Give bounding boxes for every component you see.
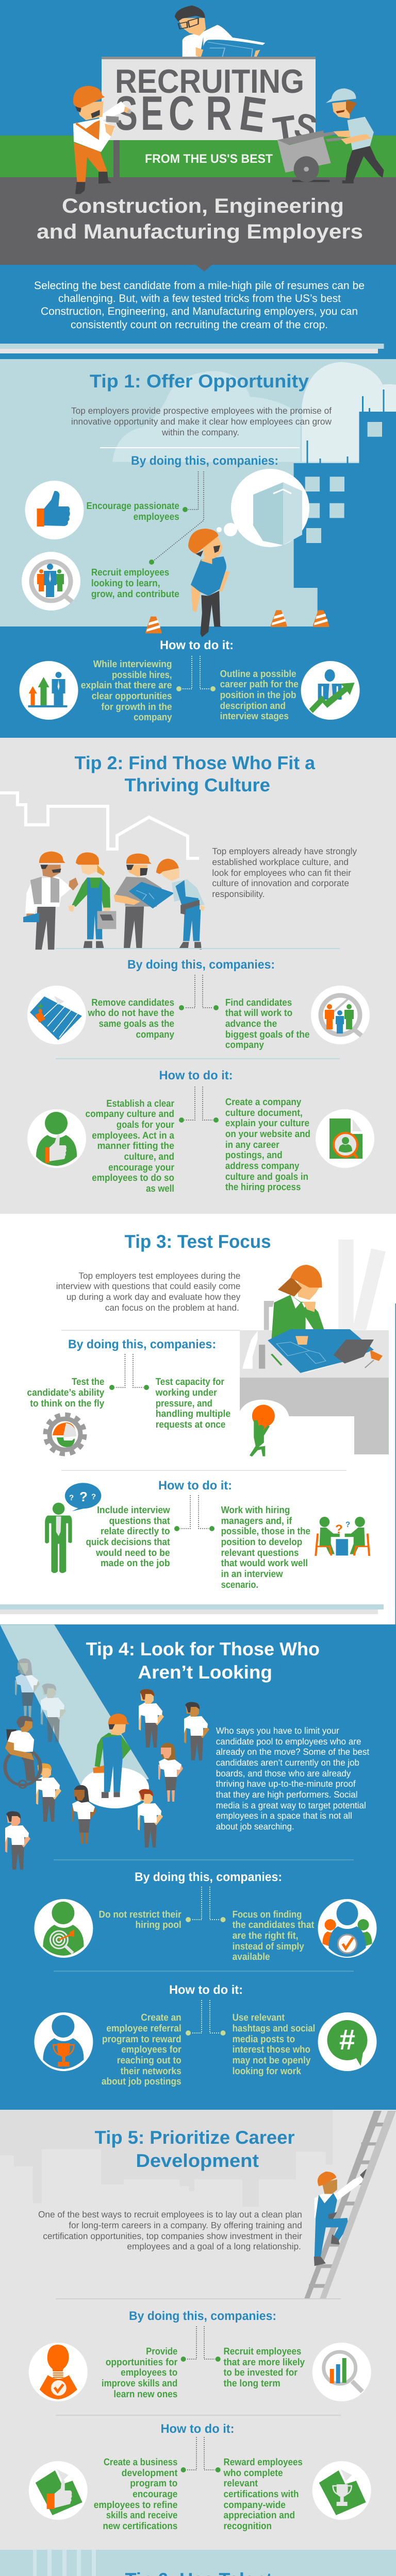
tip 1 how-to left text <box>81 659 172 723</box>
tip 5 how-to left text: program to <box>130 2478 177 2489</box>
tip 1 how-to right text: description and <box>220 701 286 711</box>
main title lines: Construction, Engineering <box>62 195 344 217</box>
tip 2 description <box>212 846 357 899</box>
intro paragraph: challenging. But, with a few tested tricks from the US’s best <box>58 293 341 304</box>
tip 5 description: employees and a goal of a long relationship. <box>127 2241 301 2251</box>
tip 1 benefit: recruit: grow, and contribute <box>91 589 179 600</box>
illustration: team of four workers <box>23 852 205 950</box>
icon: resume with candidates <box>27 986 86 1044</box>
main title lines <box>37 195 363 243</box>
tip 3 benefit left <box>27 1377 105 1409</box>
tip 4 description: employees in a space that is not all <box>216 1810 352 1821</box>
icon: person with question bubble: ? <box>79 1489 88 1504</box>
tip 3 how-to left text: made on the job <box>101 1558 170 1569</box>
tip 2 description: responsibility. <box>212 889 265 899</box>
tip 5 how-to left text <box>94 2457 178 2532</box>
tip 3 benefit right: pressure, and <box>156 1398 212 1409</box>
tip 3 how-to heading: How to do it: <box>158 1479 232 1493</box>
tip 3 how-to right text: scenario. <box>221 1580 258 1590</box>
tip 2 how-to left text <box>86 1098 174 1194</box>
tip 3 how-to right text: position to develop <box>221 1537 302 1548</box>
icon: person with rising arrow <box>301 661 360 720</box>
tip 5 title <box>95 2127 295 2171</box>
tip 3 how-to right text: in an interview <box>221 1569 283 1580</box>
tip 5 description: One of the best ways to recruit employees is to lay out a clean plan <box>38 2209 302 2219</box>
tip 2 benefit right: that will work to <box>225 1008 292 1019</box>
tip 2 title: Thriving Culture <box>125 774 270 795</box>
tip 3 benefit left: to think on the fly <box>30 1398 105 1409</box>
tip 2 benefit right <box>225 997 309 1050</box>
illustration: spotlighted worker <box>93 1714 131 1798</box>
icon: person with trophy <box>34 2012 93 2071</box>
icon: person with target <box>34 1899 93 1958</box>
tip 3 how-to right text <box>221 1505 310 1590</box>
tip 2 description: look for employees who can fit their <box>212 868 351 878</box>
tip 2 benefit left: who do not have the <box>88 1008 174 1019</box>
icon: two people at table <box>316 1517 369 1556</box>
tip 5 how-to right text: appreciation and <box>223 2510 295 2521</box>
tip 4 how-to left text: their networks <box>121 2066 182 2077</box>
tip 4 benefit left: Do not restrict their <box>99 1909 182 1920</box>
tip 2 benefit right: biggest goals of the <box>225 1029 309 1040</box>
title: Recruiting Secrets: S <box>290 105 321 149</box>
title: Recruiting Secrets: T <box>271 106 299 155</box>
tip 3 how-to right text: that would work well <box>221 1558 308 1569</box>
tip 5 description: for long-term careers in a company. By offering training and <box>69 2220 302 2230</box>
icon: document with trophy <box>312 2461 371 2520</box>
tip 1 benefit: encourage: employees <box>134 512 179 522</box>
tip 3 how-to right text: possible, those in the <box>221 1526 310 1537</box>
tip 5 benefit left <box>102 2346 178 2400</box>
tip 2 how-to right text: on your website and <box>225 1129 310 1140</box>
tip 2 how-to right text: culture and goals in <box>225 1172 308 1182</box>
tip 2 benefit left <box>88 997 174 1040</box>
skyline background <box>0 2110 333 2207</box>
tip 4 title: Tip 4: Look for Those Who <box>86 1638 320 1659</box>
sign board <box>102 57 316 177</box>
tip 5 benefit left: learn new ones <box>113 2389 177 2400</box>
tip 1 benefit: recruit <box>91 567 179 600</box>
tip 4 description: candidates aren’t currently on the job <box>216 1757 359 1768</box>
illustration: worker and cones <box>145 529 329 637</box>
title: Recruiting Secrets: S <box>115 86 138 140</box>
tip 4 how-to right text: looking for work <box>233 2066 301 2077</box>
tip 3 title: Tip 3: Test Focus <box>125 1231 271 1252</box>
tip 5 connector <box>181 2326 221 2362</box>
tip 4 how-to right text <box>233 2012 315 2077</box>
spotlight beam <box>0 1624 149 1808</box>
tip 2 description: culture of innovation and corporate <box>212 878 349 888</box>
tip 4 benefit left <box>99 1909 182 1930</box>
main title lines: and Manufacturing Employers <box>37 221 363 243</box>
tip 4 how-to left text: reaching out to <box>117 2055 182 2066</box>
tip 1 how-to left text: for growth in the <box>101 702 172 713</box>
subtitle: from the US's best: FROM THE US'S BEST <box>145 152 273 166</box>
tip 2 how-to left text: culture, and <box>124 1151 174 1162</box>
tip 4 description: boards, and those who are already <box>216 1768 351 1778</box>
divider stripes <box>0 344 384 353</box>
tip 3 description: Top employers test employees during the <box>78 1270 240 1281</box>
tip 3 description: can focus on the problem at hand. <box>105 1302 239 1313</box>
tip 5 how-to left text: encourage <box>133 2489 177 2500</box>
intro blue panel <box>0 265 396 359</box>
icon: person with question bubble: ? <box>69 1494 74 1502</box>
tip 3 description: interview with questions that could easily come <box>56 1281 240 1291</box>
tip 1 description: Top employers provide prospective employees with the promise of <box>71 405 332 416</box>
tip 3 benefit left: Test the <box>72 1377 104 1387</box>
tip 2 how-to right text: culture document, <box>225 1108 303 1118</box>
tip 4 benefit right: available <box>233 1952 270 1962</box>
icon: two people at table: ? <box>335 1522 343 1536</box>
tip 5 benefit right: the long term <box>223 2378 280 2389</box>
panel: tip 3 <box>0 1214 396 1624</box>
icon: document with magnifier person <box>316 1109 374 1168</box>
tip 3 how-to left text: Include interview <box>97 1505 170 1516</box>
tip 3 how-to connector <box>174 1495 214 1531</box>
tip 2 how-to left text: encourage your <box>108 1162 174 1173</box>
tip 2 how-to left text: goals for your <box>117 1120 174 1130</box>
tip 2 how-to right text: explain your culture <box>225 1118 309 1129</box>
tip 2 how-to left text: employees to do so <box>92 1173 174 1183</box>
tip 3 how-to left text: relate directly to <box>101 1526 170 1537</box>
tip 4 how-to left text: program to reward <box>102 2034 182 2045</box>
tip 2 how-to left text: Establish a clear <box>106 1098 174 1109</box>
tip 2 benefit right: Find candidates <box>225 997 292 1008</box>
tip 5 how-to left text: employees to refine <box>94 2500 177 2511</box>
tip 2 description: Top employers already have strongly <box>212 846 357 856</box>
tip 2 how-to heading: How to do it: <box>159 1069 233 1082</box>
tip 4 how-to heading: How to do it: <box>169 1983 243 1997</box>
panel: tip 4 <box>0 1624 396 2110</box>
tip 1 title: Tip 1: Offer Opportunity <box>90 370 309 392</box>
intro paragraph: consistently count on recruiting the cream of the crop. <box>71 319 328 331</box>
tip 5 how-to right text <box>223 2457 303 2532</box>
tip 2 how-to connector <box>179 1087 219 1123</box>
tip 5 how-to heading: How to do it: <box>161 2422 234 2436</box>
tip 4 title: Aren’t Looking <box>138 1662 272 1683</box>
title: Recruiting Secrets: C <box>169 86 194 140</box>
tip 5 how-to right text: Reward employees <box>223 2457 303 2468</box>
tip 1 how-to right text: Outline a possible <box>220 669 296 680</box>
tip 5 how-to right text: company-wide <box>223 2500 286 2511</box>
tip 4 description: media is a great way to target potential <box>216 1800 366 1810</box>
tip 2 how-to right text: in any career <box>225 1140 279 1150</box>
tip 4 benefit right: the candidates that <box>233 1920 315 1930</box>
icon: figure carrying boulder <box>236 1400 289 1460</box>
intro paragraph: Selecting the best candidate from a mile-high pile of resumes can be <box>34 280 365 292</box>
tip 2 benefit left: same goals as the <box>99 1019 174 1029</box>
tip 2 how-to left text: manner fitting the <box>97 1141 174 1151</box>
panel: tip 1 <box>0 359 396 626</box>
tip 4 description: Who says you have to limit your <box>216 1725 339 1736</box>
illustration: candidate in wheelchair <box>5 1716 42 1788</box>
tip 4 description <box>216 1725 369 1832</box>
title: Recruiting Secrets: RECRUITING <box>115 62 304 100</box>
icon: hashtag speech bubble: # <box>339 2023 355 2056</box>
tip 4 benefit right: are the right fit, <box>233 1930 298 1941</box>
icon: building in thought bubble <box>217 469 309 547</box>
illustration: worker fixing sign <box>73 86 131 194</box>
tip 3 how-to left text <box>86 1505 170 1569</box>
tip 4 title <box>86 1638 320 1683</box>
tip 4 by doing this heading: By doing this, companies: <box>135 1870 282 1884</box>
tip 3 how-to left text: questions that <box>109 1516 170 1527</box>
tip 3 description: up during a work day and evaluate how they <box>67 1292 241 1302</box>
tip 4 how-to left text: about job postings <box>102 2076 182 2087</box>
tip 4 connector <box>186 1887 226 1922</box>
tip 4 how-to left text: employees for <box>121 2044 182 2055</box>
tip 5 how-to right text: certifications with <box>223 2489 299 2500</box>
tip 1 how-to left text: While interviewing <box>93 659 172 670</box>
tip 2 how-to left text: as well <box>146 1183 174 1194</box>
tip 4 how-to left text <box>102 2012 182 2087</box>
tip 3 how-to right text: Work with hiring <box>221 1505 290 1516</box>
icon: thumbs up <box>25 481 84 539</box>
header road band <box>0 177 396 265</box>
tip 4 description: thriving have up-to-the-minute proof <box>216 1778 356 1789</box>
icon: lightbulb person <box>29 2343 88 2401</box>
tip 1 how-to right text: position in the job <box>220 690 296 701</box>
tip 5 title: Tip 5: Prioritize Career <box>95 2127 295 2148</box>
tip 3 benefit right: Test capacity for <box>156 1377 224 1387</box>
tip 3 by doing this heading: By doing this, companies: <box>68 1337 216 1351</box>
tip 5 description <box>38 2209 302 2251</box>
title: Recruiting Secrets <box>115 62 321 155</box>
tip 1 benefit: recruit: Recruit employees <box>91 567 169 578</box>
illustration: worker pushing cart <box>277 89 384 183</box>
house outline decoration <box>0 793 199 858</box>
tip 4 how-to left text: employee referral <box>106 2023 182 2034</box>
tip 1 how-to band <box>0 626 396 738</box>
tip 1 how-to right text <box>220 669 299 722</box>
tip 4 description: candidate pool to employees who are <box>216 1736 361 1747</box>
tip 4 description: about job searching. <box>216 1821 294 1832</box>
header sky background <box>0 0 396 135</box>
tip 1 connector <box>149 471 204 565</box>
tip 5 benefit left: opportunities for <box>106 2357 178 2368</box>
tip 5 title: Development <box>136 2150 259 2171</box>
tip 2 benefit right: advance the <box>225 1019 277 1029</box>
tip 2 how-to right text: postings, and <box>225 1150 283 1161</box>
tip 3 how-to left text: quick decisions that <box>86 1537 170 1548</box>
tip 1 by doing this heading: By doing this, companies: <box>131 454 278 468</box>
tip 1 how-to left text: explain that there are <box>81 680 172 691</box>
tip 3 benefit right: handling multiple <box>156 1409 230 1419</box>
tip 2 title <box>74 752 316 795</box>
tip 1 description: within the company. <box>161 427 239 437</box>
background columns <box>33 2550 96 2576</box>
tip 5 description: certification opportunities, top companies show investment in their <box>43 2231 302 2241</box>
tip 5 how-to left text: Create a business <box>104 2457 177 2468</box>
icon: person with question bubble <box>45 1483 101 1573</box>
tip 1 benefit: encourage: Encourage passionate <box>87 501 179 512</box>
header pointer notch <box>196 265 212 272</box>
tip 3 how-to right text: relevant questions <box>221 1548 299 1558</box>
tip 4 how-to left text: Create an <box>141 2012 182 2023</box>
tip 1 how-to right text: interview stages <box>220 711 289 722</box>
intro paragraph: Construction, Engineering, and Manufacturing employers, you can <box>41 306 358 317</box>
tip 5 benefit right: Recruit employees <box>223 2346 301 2357</box>
icon: two people at table: ? <box>345 1520 350 1529</box>
tip 5 benefit left: Provide <box>146 2346 177 2357</box>
tip 1 benefit: recruit: looking to learn, <box>91 578 160 589</box>
illustration: ladder and climbing worker <box>304 2111 396 2299</box>
icon: team with check <box>318 1899 376 1958</box>
icon: magnifier with three people <box>311 986 370 1044</box>
tip 1 description <box>71 405 332 437</box>
title: Recruiting Secrets: E <box>141 86 163 140</box>
tip 5 benefit right: that are more likely <box>223 2357 305 2368</box>
tip 2 benefit right: company <box>225 1040 264 1050</box>
tip 2 by doing this heading: By doing this, companies: <box>127 958 275 972</box>
tip 2 how-to left text: employees. Act in a <box>92 1130 174 1141</box>
tip 4 how-to connector <box>186 2000 226 2036</box>
tip 2 benefit left: Remove candidates <box>91 997 174 1008</box>
tip 5 how-to left text: development <box>122 2468 178 2479</box>
tip 1 benefit: encourage <box>87 501 179 522</box>
tip 3 benefit right <box>155 1377 230 1430</box>
icon: search for team <box>22 552 80 611</box>
tip 5 how-to right text: relevant <box>223 2478 258 2489</box>
intro paragraph <box>34 280 365 331</box>
title: Recruiting Secrets: R <box>206 86 232 140</box>
panel: tip 6 <box>0 2550 396 2576</box>
tip 3 benefit right: requests at once <box>156 1419 225 1430</box>
tip 4 benefit right: Focus on finding <box>233 1909 302 1920</box>
tip 5 how-to left text: new certifications <box>103 2521 177 2532</box>
tip 4 how-to right text: Use relevant <box>233 2012 285 2023</box>
tip 4 how-to right text: media posts to <box>233 2034 295 2045</box>
icon: magnifier with bar chart <box>312 2343 371 2401</box>
tip 1 how-to left text: possible hires, <box>112 670 172 681</box>
panel: tip 2 <box>0 738 396 1214</box>
icon: person with thumbs up <box>27 1109 86 1168</box>
tip 4 benefit right <box>233 1909 315 1962</box>
tip 3 how-to right text: managers and, if <box>221 1516 292 1527</box>
tip 2 description: established workplace culture, and <box>212 857 349 867</box>
tip 1 how-to left text: company <box>134 712 172 723</box>
tip 4 description: that they are high performers. Social <box>216 1789 358 1800</box>
title: Recruiting Secrets: E <box>236 86 270 143</box>
tip 1 how-to connector <box>176 656 216 691</box>
illustration: engineer reading blueprint <box>175 6 265 58</box>
tip 1 description: innovative opportunity and make it clear how employees can grow <box>71 416 332 427</box>
divider stripes <box>0 1604 384 1614</box>
tip 4 how-to right text: hashtags and social <box>233 2023 315 2034</box>
tip 2 how-to right text: address company <box>225 1161 300 1172</box>
tip 3 benefit left: candidate’s ability <box>27 1387 105 1398</box>
icon: person with question bubble: ? <box>91 1493 96 1501</box>
tip 5 how-to right text: who complete <box>223 2468 283 2479</box>
tip 5 benefit left: improve skills and <box>102 2378 177 2389</box>
tip 1 how-to right text: career path for the <box>220 679 299 690</box>
tip 2 how-to right text: Create a company <box>225 1097 302 1108</box>
tip 3 benefit right: working under <box>155 1387 217 1398</box>
panel: tip 5 <box>0 2110 396 2550</box>
tip 4 benefit right: instead of simply <box>233 1941 304 1952</box>
tip 1 how-to heading: How to do it: <box>160 638 234 652</box>
tip 3 description <box>56 1270 241 1313</box>
tip 2 benefit left: company <box>136 1029 174 1040</box>
tip 2 how-to left text: company culture and <box>86 1109 174 1120</box>
tip 5 benefit right <box>223 2346 305 2389</box>
tip 5 how-to left text: skills and receive <box>106 2510 177 2521</box>
icon: growth arrows and person <box>20 661 78 720</box>
tip 5 how-to connector <box>181 2437 221 2472</box>
icon: document with thumbs up <box>29 2461 88 2520</box>
icon: hashtag speech bubble <box>318 2012 376 2071</box>
tip 5 benefit right: to be invested for <box>223 2367 298 2378</box>
tip 3 how-to left text: would need to be <box>95 1548 170 1558</box>
tip 5 by doing this heading: By doing this, companies: <box>129 2309 276 2323</box>
illustration: engineer at drafting desk <box>240 1240 389 1454</box>
tip 4 how-to right text: may not be openly <box>233 2055 311 2066</box>
tip 1 how-to left text: clear opportunities <box>92 691 172 702</box>
illustration: candidates standing around <box>5 1658 209 1870</box>
tip 4 description: already on the move? Some of the best <box>216 1747 369 1757</box>
tip 2 connector <box>179 975 219 1010</box>
tip 5 benefit left: employees to <box>121 2367 177 2378</box>
tip 2 title: Tip 2: Find Those Who Fit a <box>74 752 316 773</box>
icon: gear with head <box>46 1415 84 1453</box>
tip 2 how-to right text: the hiring process <box>225 1182 301 1193</box>
tip 4 benefit left: hiring pool <box>136 1920 182 1930</box>
tip 2 how-to right text <box>225 1097 310 1193</box>
tip 3 connector <box>109 1354 149 1390</box>
header grass band <box>0 135 396 177</box>
tip 5 how-to right text: recognition <box>223 2521 272 2532</box>
tip 4 how-to right text: interest those who <box>233 2044 310 2055</box>
